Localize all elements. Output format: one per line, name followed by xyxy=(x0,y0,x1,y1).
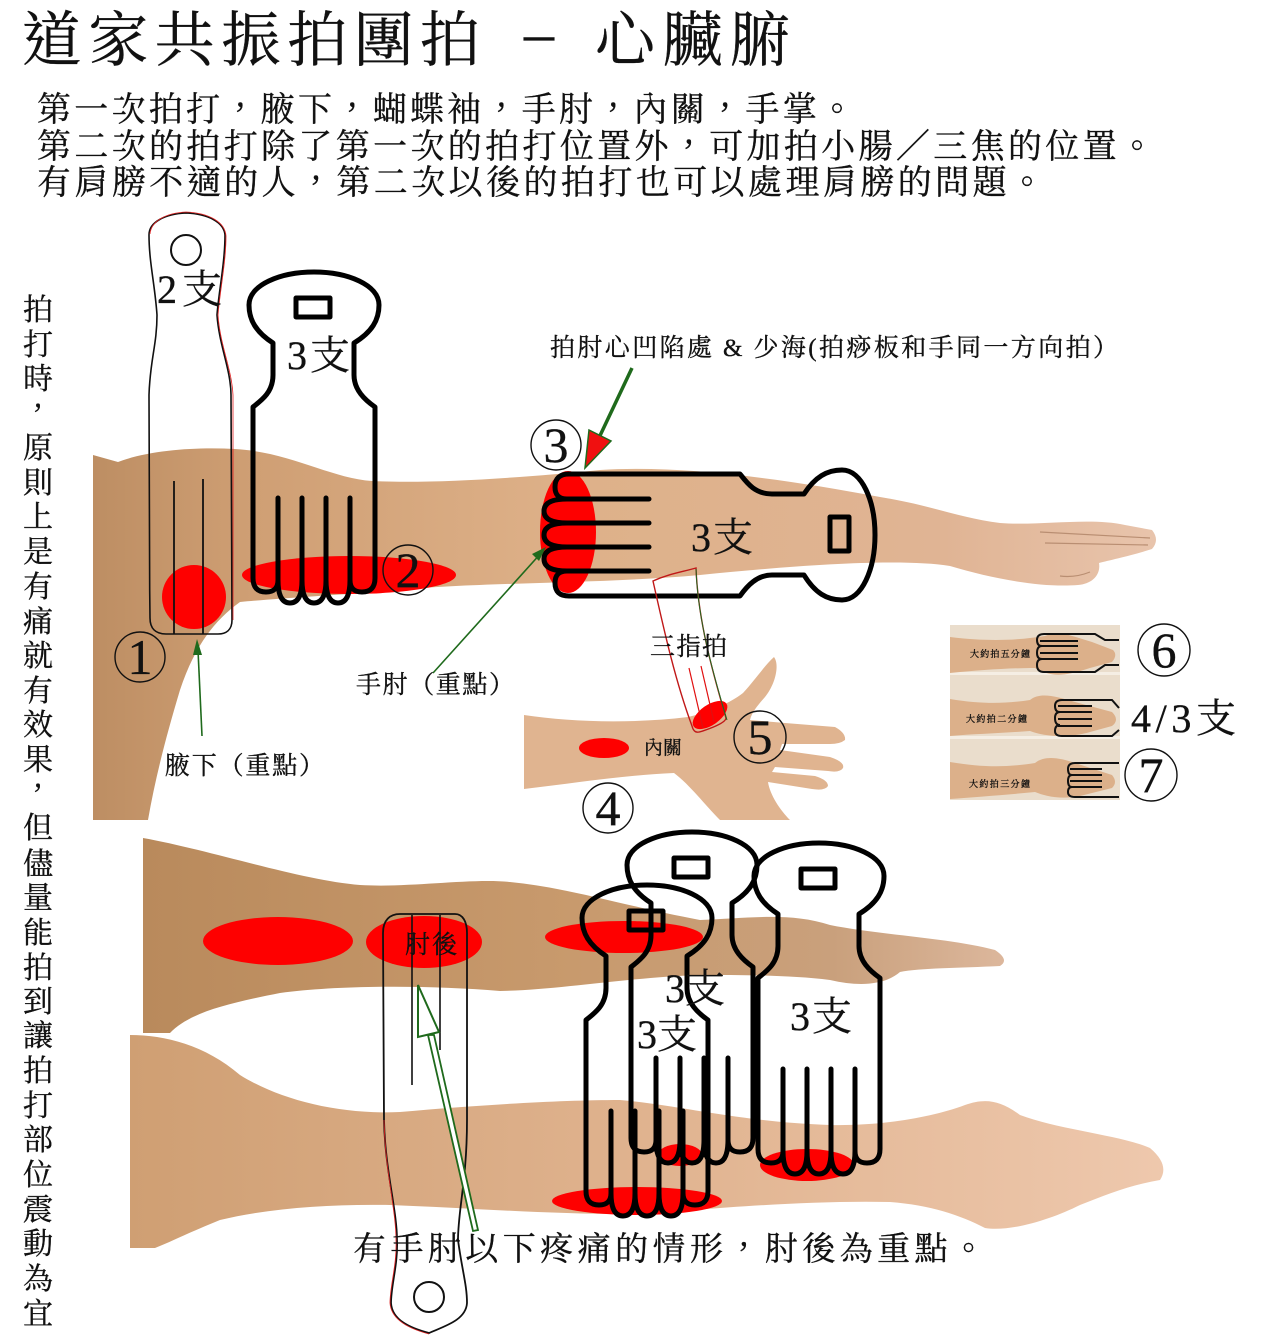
paddle: 3 sticks, right xyxy=(754,843,884,1174)
thumbnail arms xyxy=(950,634,1116,799)
intro text block: 第一次拍打，腋下，蝴蝶袖，手肘，內關，手掌。 xyxy=(37,91,854,129)
circled digits: 6 xyxy=(1152,622,1176,678)
paddle: 3 sticks, front centre xyxy=(582,885,712,1216)
circled number markers xyxy=(115,420,1190,833)
paddle labels upper: 3支 xyxy=(691,515,753,560)
label: elbow key point: 手肘（重點） xyxy=(356,671,514,699)
paddle: 3 sticks, inner elbow xyxy=(249,272,379,603)
paddle: 2 sticks, back of elbow xyxy=(383,914,467,1334)
title: – xyxy=(523,0,555,66)
red zones: hand xyxy=(579,695,732,758)
upper arm photo (inner side) xyxy=(93,448,1156,820)
arrow: to armpit xyxy=(193,639,202,736)
bottom arm photo (palm side) xyxy=(130,1035,1163,1248)
paddle labels upper: 3支 xyxy=(287,333,350,378)
paddle labels upper xyxy=(157,267,753,560)
arrow: to elbow hollow xyxy=(585,368,632,468)
paddle labels lower: 3支 xyxy=(637,1012,697,1057)
paddle: three finger small xyxy=(653,568,727,732)
label: 4/3 sticks: 4/3支 xyxy=(1131,696,1236,741)
label: back of elbow: 肘後 xyxy=(405,931,457,959)
red zones: upper arm xyxy=(162,471,596,629)
intro text block xyxy=(37,91,1154,202)
paddle: 3 sticks, horizontal xyxy=(544,470,875,600)
circled digits xyxy=(128,417,1176,836)
paddle: 3 sticks, rear centre xyxy=(627,832,757,1163)
title xyxy=(22,0,790,74)
thumbnail comb strokes xyxy=(1037,634,1119,797)
paddle: 2 sticks, armpit xyxy=(149,212,233,634)
intro text block: 第二次的拍打除了第一次的拍打位置外，可加拍小腸／三焦的位置。 xyxy=(37,128,1154,166)
hand creases: upper arm xyxy=(1040,532,1150,576)
circled digits: 1 xyxy=(128,629,152,685)
arrow: to elbow xyxy=(433,547,546,673)
label: armpit key point: 腋下（重點） xyxy=(165,752,324,780)
title: 道家共振拍團拍 xyxy=(22,8,480,74)
label: neiguan: 內關 xyxy=(644,737,682,759)
thumbnail captions: 大約拍五分鐘 xyxy=(970,648,1030,659)
circled digits: 4 xyxy=(596,780,620,836)
title: 心臟腑 xyxy=(595,8,790,74)
circled digits: 5 xyxy=(748,709,772,765)
intro text block: 有肩膀不適的人，第二次以後的拍打也可以處理肩膀的問題。 xyxy=(37,164,1044,202)
thumbnail captions: 大約拍三分鐘 xyxy=(969,778,1030,789)
paddle labels lower xyxy=(637,966,852,1057)
hand photo (wrist and palm) xyxy=(524,657,845,820)
circled digits: 2 xyxy=(396,542,420,598)
arrow: hollow arrow to back of elbow xyxy=(418,985,478,1231)
paddle labels upper: 2支 xyxy=(157,267,222,312)
circled digits: 3 xyxy=(544,417,568,473)
label: three finger: 三指拍 xyxy=(650,633,727,661)
label: elbow hollow: 拍肘心凹陷處 & 少海(拍痧板和手同一方向拍） xyxy=(550,334,1118,362)
thumbnail captions: 大約拍二分鐘 xyxy=(966,713,1027,724)
red zones: lower arms xyxy=(203,916,854,1215)
vertical side note: 拍打時，原則上是有痛就有效果，但儘量能拍到讓拍打部位震動為宜 xyxy=(23,294,54,1331)
panel: hand position thumbnails xyxy=(950,625,1120,800)
paddle labels lower: 3支 xyxy=(790,994,852,1039)
circled digits: 7 xyxy=(1138,747,1164,803)
thumbnail captions xyxy=(966,648,1030,789)
paddle labels lower: 3支 xyxy=(665,966,725,1011)
caption: below elbow pain: 有手肘以下疼痛的情形，肘後為重點。 xyxy=(353,1231,985,1268)
lower arm photo (back side) xyxy=(143,838,1004,1033)
